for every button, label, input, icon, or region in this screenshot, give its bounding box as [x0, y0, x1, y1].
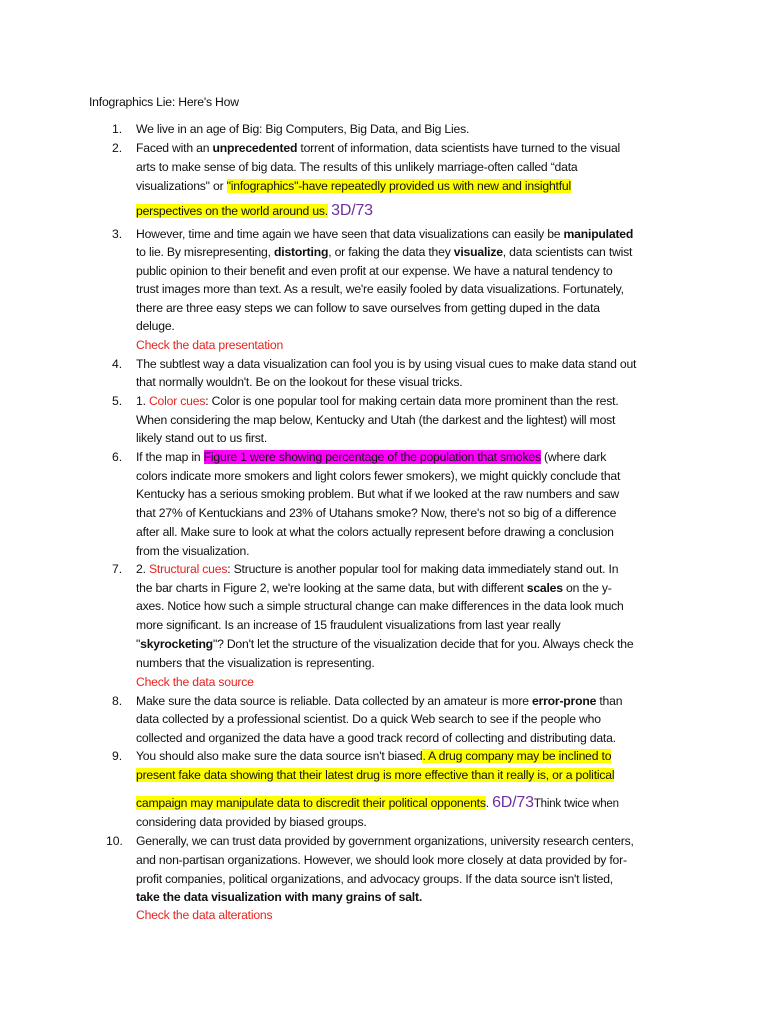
list item 5: likely stand out to us first. — [136, 431, 267, 445]
list item 7: 7. — [112, 562, 122, 576]
list item 3: 3. — [112, 227, 122, 241]
list item 8: 8. — [112, 694, 122, 708]
list item 10: and non-partisan organizations. However, we should look more closely at data provided by for- — [136, 853, 627, 867]
list item 7: the bar charts in Figure 2, we're looking at the same data, but with different scales on the y- — [136, 581, 612, 595]
list item 4: that normally wouldn't. Be on the lookout for these visual tricks. — [136, 375, 462, 389]
list item 2: Faced with an unprecedented torrent of information, data scientists have turned to the visual — [136, 141, 620, 155]
list item 3: trust images more than text. As a result, we're easily fooled by data visualizations. Fortunately, — [136, 282, 624, 296]
list item 9: You should also make sure the data source isn't biased. A drug company may be inclined to — [136, 749, 611, 763]
heading: check the data presentation: Check the data presentation — [136, 338, 283, 352]
list item 4: The subtlest way a data visualization can fool you is by using visual cues to make data stand out — [136, 357, 636, 371]
list item 2: visualizations" or "infographics"-have repeatedly provided us with new and insightful — [136, 179, 571, 193]
list item 8: data collected by a professional scientist. Do a quick Web search to see if the people who — [136, 712, 601, 726]
list item 2 — [112, 141, 620, 219]
list item 10: profit companies, political organizations, and advocacy groups. If the data source isn't listed, — [136, 872, 613, 886]
list item 5: 1. Color cues: Color is one popular tool for making certain data more prominent than the rest. — [136, 394, 619, 408]
list item 6: from the visualization. — [136, 544, 249, 558]
list item 6: If the map in Figure 1 were showing percentage of the population that smokes (where dark — [136, 450, 606, 464]
list item 6: that 27% of Kentuckians and 23% of Utahans smoke? Now, there's not so big of a difference — [136, 506, 616, 520]
list item 7: axes. Notice how such a simple structural change can make differences in the data look much — [136, 599, 624, 613]
title: Infographics Lie: Here's How — [89, 95, 239, 109]
heading: check the data source: Check the data source — [136, 675, 254, 689]
list item 2: 2. — [112, 141, 122, 155]
list item 9: campaign may manipulate data to discredit their political opponents. 6D/73Think twice when — [136, 794, 619, 811]
list item 8: collected and organized the data have a good track record of collecting and distributing data. — [136, 731, 616, 745]
list item 9 — [112, 749, 619, 829]
list item 2: arts to make sense of big data. The results of this unlikely marriage-often called “data — [136, 160, 577, 174]
list item 6: after all. Make sure to look at what the colors actually represent before drawing a conclusion — [136, 525, 614, 539]
list item 8: Make sure the data source is reliable. Data collected by an amateur is more error-prone than — [136, 694, 622, 708]
list item 3: deluge. — [136, 319, 175, 333]
list item 9: present fake data showing that their latest drug is more effective than it really is, or a political — [136, 768, 614, 782]
list item 7 — [112, 562, 634, 670]
list item 7: "skyrocketing"? Don't let the structure of the visualization decide that for you. Always check the — [136, 637, 633, 651]
list item 1: We live in an age of Big: Big Computers, Big Data, and Big Lies. — [136, 122, 469, 136]
list item 5 — [112, 394, 619, 445]
list item 10: take the data visualization with many grains of salt. — [136, 890, 422, 904]
list item 3 — [112, 227, 633, 333]
list item 3: there are three easy steps we can follow to save ourselves from getting duped in the data — [136, 301, 600, 315]
list item 5: When considering the map below, Kentucky and Utah (the darkest and the lightest) will most — [136, 413, 615, 427]
list item 6 — [112, 450, 620, 558]
list item 1: 1. — [112, 122, 122, 136]
heading: check the data alterations: Check the data alterations — [136, 908, 272, 922]
list item 10: Generally, we can trust data provided by government organizations, university research centers, — [136, 834, 634, 848]
list item 6: colors indicate more smokers and light colors fewer smokers), we might quickly conclude that — [136, 469, 620, 483]
list item 2: perspectives on the world around us. 3D/73 — [136, 202, 373, 219]
list item 9: considering data provided by biased groups. — [136, 815, 367, 829]
list item 6: Kentucky has a serious smoking problem. But what if we looked at the raw numbers and saw — [136, 487, 619, 501]
list item 7: numbers that the visualization is representing. — [136, 656, 375, 670]
list item 10 — [106, 834, 634, 904]
list item 5: 5. — [112, 394, 122, 408]
list item 4 — [112, 357, 636, 389]
list item 3: However, time and time again we have seen that data visualizations can easily be manipulated — [136, 227, 633, 241]
list item 10: 10. — [106, 834, 123, 848]
list item 8 — [112, 694, 622, 745]
list item 4: 4. — [112, 357, 122, 371]
list item 6: 6. — [112, 450, 122, 464]
list item 9: 9. — [112, 749, 122, 763]
list item 3: public opinion to their benefit and even profit at our expense. We have a natural tendency to — [136, 264, 612, 278]
list item 7: 2. Structural cues: Structure is another popular tool for making data immediately stand out. In — [136, 562, 618, 576]
list item 3: to lie. By misrepresenting, distorting, or faking the data they visualize, data scientists can twist — [136, 245, 632, 259]
list item 7: more significant. Is an increase of 15 fraudulent visualizations from last year really — [136, 618, 560, 632]
